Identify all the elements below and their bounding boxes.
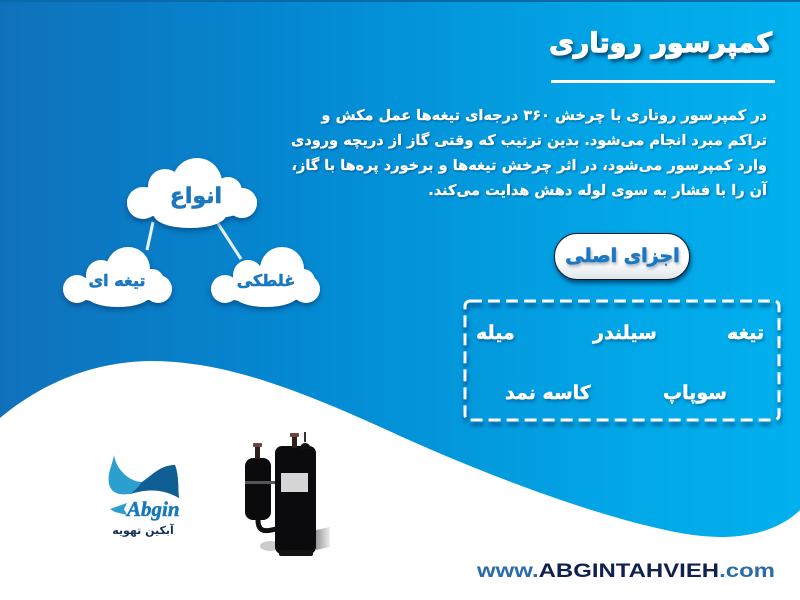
label: blade: تیغه ای bbox=[88, 271, 146, 290]
icon: rotary compressor bbox=[245, 432, 330, 556]
main parts pill bbox=[554, 233, 690, 280]
label: rolling: غلطکی bbox=[237, 271, 295, 290]
diagram: types clouds bbox=[60, 158, 323, 313]
website url: www.ABGINTAHVIEH.com bbox=[477, 561, 775, 582]
label: types: انواع bbox=[170, 184, 222, 209]
icon: Abgin logo bbox=[108, 455, 180, 537]
part: cylinder: سیلندر bbox=[593, 322, 657, 344]
part: shaft: میله bbox=[476, 322, 515, 344]
connector lines bbox=[147, 222, 241, 259]
description text: وارد کمپرسور می‌شود، در اثر چرخش تیغه‌ها و برخورد پره‌ها با گاز، bbox=[292, 158, 767, 174]
logo wordmark: Abgin bbox=[125, 497, 180, 521]
parts dashed box bbox=[462, 300, 784, 428]
description text bbox=[291, 108, 769, 201]
description text: تراکم مبرد انجام می‌شود. بدین ترتیب که وقتی گاز از دریچه ورودی bbox=[291, 133, 767, 149]
description text: آن را با فشار به سوی لوله دهش هدایت می‌کند. bbox=[428, 183, 767, 199]
logo subtitle: آبکین تهویه bbox=[112, 523, 174, 537]
part: blade: تیغه bbox=[727, 322, 764, 344]
title underline bbox=[551, 80, 775, 83]
cloud: blade bbox=[63, 247, 172, 307]
title: کمپرسور روتاری bbox=[549, 28, 772, 59]
part: valve: سوپاپ bbox=[663, 382, 727, 404]
description text: در کمپرسور روتاری با چرخش ۳۶۰ درجه‌ای تیغه‌ها عمل مکش و bbox=[322, 108, 767, 124]
part: felt cup: کاسه نمد bbox=[505, 382, 591, 404]
main parts label: اجزای اصلی bbox=[565, 245, 680, 267]
cloud: types bbox=[127, 158, 257, 228]
cloud: rolling bbox=[211, 247, 320, 307]
